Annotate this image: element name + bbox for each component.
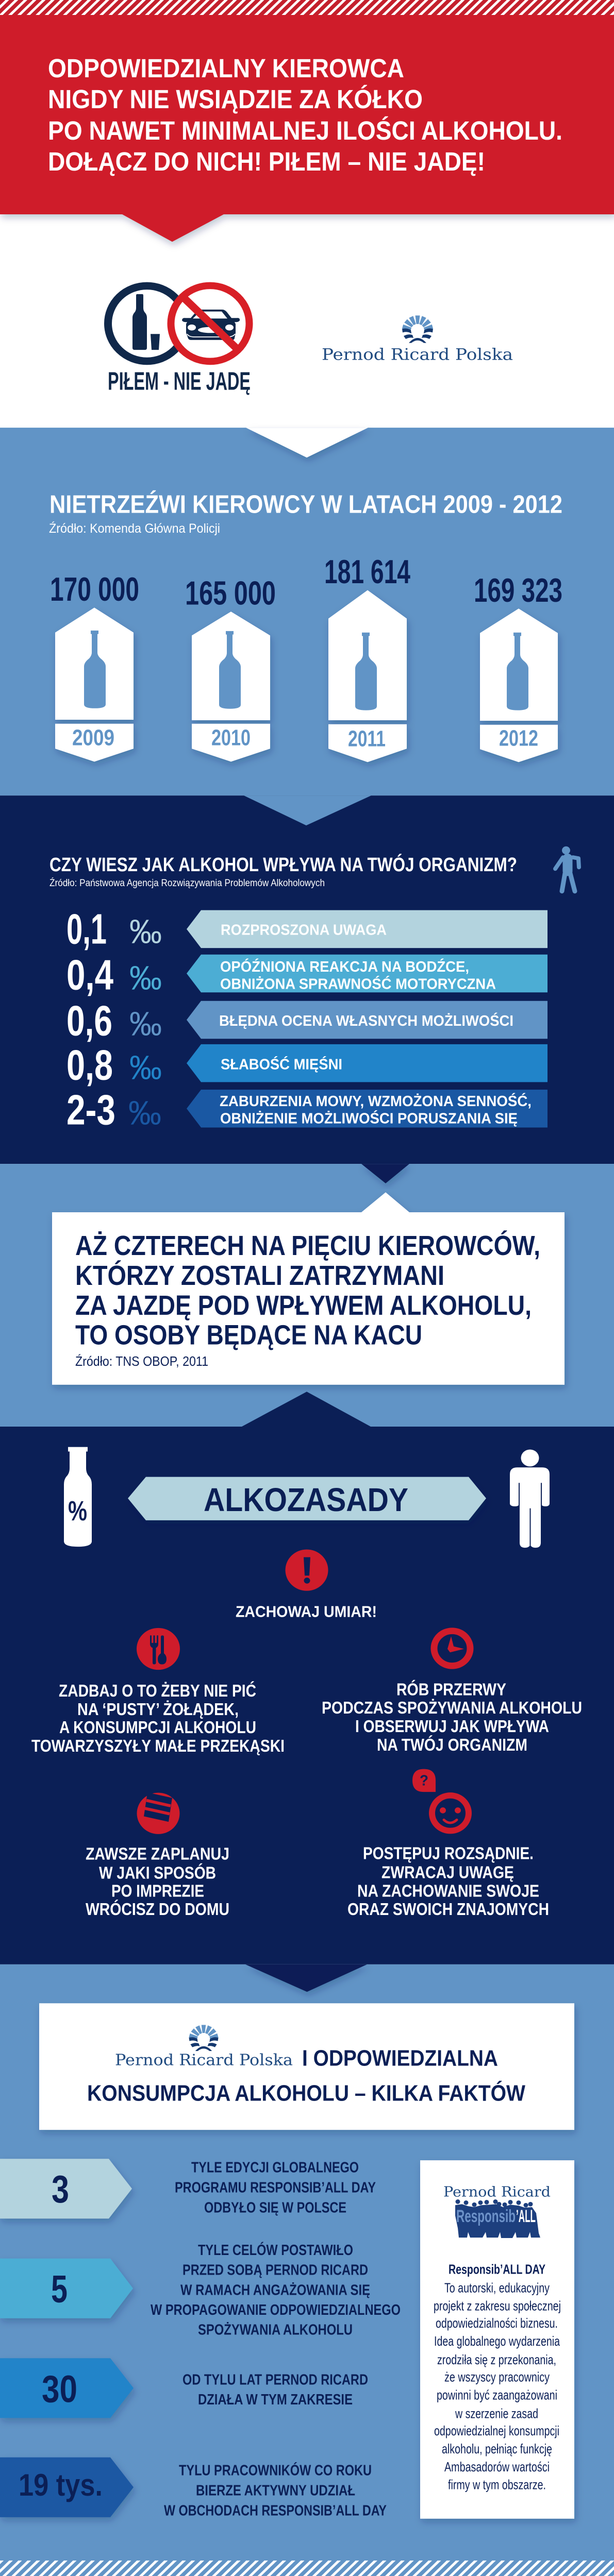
- fact 3: [0, 2159, 376, 2218]
- icon: note: [137, 1792, 179, 1834]
- sidebar text: alkoholu, pełniąc funkcję: [442, 2441, 552, 2456]
- white pointer: [246, 428, 368, 457]
- source: Źródło: TNS OBOP, 2011: [75, 1353, 208, 1369]
- rule text: RÓB PRZERWY: [396, 1680, 506, 1699]
- number: 5: [51, 2268, 68, 2311]
- icon: walking person: [555, 846, 579, 891]
- blue background: [0, 1164, 614, 1427]
- rule text: NA ‘PUSTY’ ŻOŁĄDEK,: [77, 1701, 239, 1719]
- banner: [128, 1477, 486, 1520]
- bottle ring: [108, 286, 186, 361]
- bar: [187, 1090, 547, 1127]
- rule: breaks: [322, 1631, 582, 1755]
- heading line 1: I ODPOWIEDZIALNA: [302, 2046, 498, 2071]
- rule text: ZADBAJ O TO ŻEBY NIE PIĆ: [59, 1681, 256, 1701]
- per mille: ‰: [128, 1094, 161, 1132]
- rule: plan: [86, 1792, 229, 1919]
- rule text: [347, 1844, 549, 1919]
- bar label: OBNIŻONA SPRAWNOŚĆ MOTORYCZNA: [220, 975, 496, 992]
- logo: Pernod Ricard Polska: [322, 315, 513, 364]
- sidebar text: powinni być zaangażowani: [437, 2387, 557, 2402]
- rule text: TOWARZYSZYŁY MAŁE PRZEKĄSKI: [31, 1737, 285, 1756]
- icon: bottle with percent: %: [68, 1495, 87, 1527]
- fact text: PRZED SOBĄ PERNOD RICARD: [182, 2262, 368, 2279]
- bar label: OPÓŹNIONA REAKCJA NA BODŹCE,: [220, 958, 469, 975]
- value 0,1: 0,1: [67, 905, 107, 953]
- bar label: [220, 1092, 532, 1127]
- number: 3: [52, 2168, 69, 2211]
- rule text: ORAZ SWOICH ZNAJOMYCH: [347, 1901, 549, 1919]
- logo: Piłem - nie jadę: [108, 285, 251, 395]
- navy background: [0, 1392, 614, 1964]
- row 0,6: [67, 997, 547, 1044]
- rule text: ZAWSZE ZAPLANUJ: [86, 1845, 229, 1864]
- fact 30: [0, 2358, 368, 2418]
- heading line 2: KONSUMPCJA ALKOHOLU – KILKA FAKTÓW: [87, 2080, 525, 2106]
- white box: [420, 2160, 574, 2519]
- bar: [187, 910, 547, 948]
- logo name: Pernod Ricard: [443, 2184, 551, 2200]
- bar: [187, 1044, 547, 1082]
- sidebar text: odpowiedzialnej konsumpcji: [434, 2424, 559, 2438]
- rule text: I OBSERWUJ JAK WPŁYWA: [355, 1718, 549, 1736]
- sidebar text: odpowiedzialności biznesu.: [436, 2316, 558, 2331]
- bottle 2009: [84, 631, 106, 708]
- year 2012: 2012: [499, 726, 538, 751]
- fact text: [175, 2159, 376, 2216]
- column 2012: [474, 571, 562, 762]
- source: Źródło: Państwowa Agencja Rozwiązywania Problemów Alkoholowych: [49, 877, 325, 889]
- fact 19 tys.: [0, 2458, 387, 2519]
- panel: Pernod Ricard facts: [0, 1964, 614, 2576]
- icon: question bubble: [412, 1769, 436, 1792]
- value 2-3: 2-3: [67, 1086, 115, 1133]
- blue background: [0, 1964, 614, 2576]
- value 0,8: 0,8: [67, 1041, 113, 1089]
- car: [182, 310, 240, 340]
- rule text: POSTĘPUJ ROZSĄDNIE.: [363, 1844, 534, 1863]
- bottle 2011: [355, 633, 377, 710]
- rule: moderation: [236, 1549, 377, 1620]
- header text: [48, 54, 562, 177]
- logo: crowd silhouette: Responsib: [456, 2207, 516, 2226]
- source: Źródło: Komenda Główna Policji: [49, 521, 220, 536]
- column 2010: [185, 574, 276, 761]
- white box: [39, 2003, 574, 2130]
- sidebar text: [434, 2280, 561, 2493]
- sidebar text: To autorski, edukacyjny: [444, 2280, 550, 2295]
- per mille: ‰: [129, 1005, 162, 1043]
- fact text: OD TYLU LAT PERNOD RICARD: [182, 2371, 368, 2388]
- panel: hangover callout: [0, 1164, 614, 1427]
- bar label: BŁĘDNA OCENA WŁASNYCH MOŻLIWOŚCI: [219, 1012, 513, 1029]
- navy pointer: [245, 1964, 367, 1992]
- rule: eat: [31, 1628, 285, 1756]
- rule text: NA TWÓJ ORGANIZM: [377, 1735, 527, 1755]
- heading box: [39, 2003, 574, 2130]
- panel: drunk drivers 2009-2012: [0, 428, 614, 795]
- icon: smiling face: [432, 1795, 469, 1831]
- pentagon 2012: [480, 608, 558, 721]
- rule text: [31, 1681, 285, 1756]
- sidebar text: Ambasadorów wartości: [444, 2459, 550, 2475]
- red slash: [184, 298, 237, 349]
- sun mark: [402, 315, 433, 343]
- fact text: TYLU PRACOWNIKÓW CO ROKU: [179, 2462, 372, 2479]
- sidebar text: projekt z zakresu społecznej: [434, 2298, 561, 2313]
- fact text: [182, 2371, 368, 2408]
- sidebar text: firmy w tym obszarze.: [448, 2477, 546, 2493]
- rule: sensible: [347, 1769, 549, 1919]
- bar label: ROZPROSZONA UWAGA: [221, 922, 387, 938]
- panel: alcohol rules: [0, 1392, 614, 1964]
- year tag 2012: [480, 725, 558, 762]
- arrow: [0, 2259, 133, 2318]
- banner title: ALKOZASADY: [204, 1481, 408, 1518]
- header text: ODPOWIEDZIALNY KIEROWCA: [48, 54, 404, 83]
- no-driving ring: [171, 285, 250, 361]
- fact 5: [0, 2241, 401, 2338]
- row 0,8: [67, 1041, 547, 1089]
- per mille: ‰: [129, 959, 162, 997]
- rule text: W JAKI SPOSÓB: [99, 1863, 216, 1883]
- rule text: ZWRACAJ UWAGĘ: [381, 1863, 514, 1882]
- year 2011: 2011: [348, 726, 386, 751]
- number: 19 tys.: [19, 2468, 103, 2502]
- row 2-3: [67, 1086, 547, 1133]
- fact text: DZIAŁA W TYM ZAKRESIE: [198, 2392, 353, 2408]
- pentagon 2010: [192, 612, 270, 720]
- bottle and glass: [132, 294, 160, 350]
- logo: crowd silhouette: ’ALL: [516, 2207, 536, 2226]
- sidebar heading: Responsib’ALL DAY: [449, 2262, 545, 2277]
- fact text: ODBYŁO SIĘ W POLSCE: [204, 2199, 346, 2216]
- blue pointer: [244, 795, 371, 825]
- fact text: W PROPAGOWANIE ODPOWIEDZIALNEGO: [151, 2301, 401, 2318]
- header text: NIGDY NIE WSIĄDZIE ZA KÓŁKO: [48, 85, 423, 114]
- callout text: KTÓRZY ZOSTALI ZATRZYMANI: [75, 1260, 444, 1291]
- fact text: TYLE EDYCJI GLOBALNEGO: [191, 2159, 359, 2176]
- rule text: NA ZACHOWANIE SWOJE: [357, 1882, 539, 1901]
- year 2010: 2010: [211, 725, 251, 750]
- arrow: [0, 2159, 132, 2218]
- brand name: Pernod Ricard Polska: [115, 2052, 293, 2069]
- sidebar text: zrodziła się z przekonania,: [437, 2352, 556, 2367]
- per mille: ‰: [129, 1049, 162, 1087]
- value 2012: 169 323: [474, 571, 562, 609]
- year tag 2009: [55, 724, 134, 761]
- rule text: PO IMPREZIE: [111, 1882, 204, 1901]
- sun mark: [189, 2025, 219, 2051]
- bottle 2010: [219, 631, 241, 709]
- fact text: BIERZE AKTYWNY UDZIAŁ: [196, 2482, 355, 2499]
- year tag 2011: [328, 724, 407, 762]
- bar label: ZABURZENIA MOWY, WZMOŻONA SENNOŚĆ,: [220, 1092, 532, 1110]
- value 2011: 181 614: [324, 553, 410, 590]
- bottom stripes: [0, 2561, 614, 2576]
- year tag 2010: [192, 724, 270, 761]
- fact text: W RAMACH ANGAŻOWANIA SIĘ: [180, 2282, 370, 2298]
- panel: red header: [0, 0, 614, 242]
- bar label: [220, 958, 496, 992]
- row 0,4: [67, 951, 547, 998]
- callout text: ZA JAZDĘ POD WPŁYWEM ALKOHOLU,: [75, 1290, 532, 1321]
- value 2010: 165 000: [185, 574, 276, 612]
- row 0,1: [67, 905, 547, 953]
- sidebar text: że wszyscy pracownicy: [444, 2369, 550, 2385]
- icon: bottle with percent: [64, 1447, 92, 1547]
- icon: clock: [434, 1631, 470, 1666]
- year 2009: 2009: [72, 725, 114, 750]
- callout text: [75, 1230, 540, 1350]
- navy background: [0, 795, 614, 1164]
- icon: standing man: [510, 1449, 550, 1548]
- banner shape: [128, 1477, 486, 1520]
- sidebar text: Idea globalnego wydarzenia: [434, 2333, 560, 2349]
- pentagon 2011: [328, 590, 407, 720]
- fact text: W OBCHODACH RESPONSIB’ALL DAY: [164, 2502, 387, 2519]
- rule text: A KONSUMPCJI ALKOHOLU: [59, 1718, 256, 1737]
- value 0,4: 0,4: [67, 951, 113, 998]
- panel: alcohol effects: [0, 795, 614, 1164]
- rule text: [86, 1845, 229, 1919]
- icon: question bubble: ?: [420, 1772, 428, 1789]
- number: 30: [42, 2367, 77, 2411]
- red panel shape: [0, 15, 614, 242]
- logo: crowd silhouette: [455, 2199, 540, 2238]
- fact text: PROGRAMU RESPONSIB’ALL DAY: [175, 2179, 376, 2196]
- campaign name: PIŁEM - NIE JADĘ: [108, 367, 251, 395]
- bar: [187, 1001, 547, 1039]
- bar label: SŁABOŚĆ MIĘŚNI: [221, 1056, 342, 1073]
- header text: DOŁĄCZ DO NICH! PIŁEM – NIE JADĘ!: [48, 147, 485, 177]
- bar: [187, 955, 547, 992]
- rule text: ZACHOWAJ UMIAR!: [236, 1603, 377, 1620]
- sidebar text: w szerzenie zasad: [455, 2406, 538, 2421]
- value 0,6: 0,6: [67, 997, 112, 1044]
- column 2009: [50, 570, 139, 761]
- callout text: TO OSOBY BĘDĄCE NA KACU: [75, 1319, 422, 1350]
- fact text: [151, 2241, 401, 2338]
- arrow: [0, 2458, 134, 2517]
- rule text: WRÓCISZ DO DOMU: [86, 1900, 229, 1919]
- column 2011: [324, 553, 410, 762]
- navy pointer: [361, 1164, 409, 1183]
- bottle 2012: [507, 633, 528, 710]
- value 2009: 170 000: [50, 570, 139, 608]
- rule text: [322, 1680, 582, 1755]
- fact text: [164, 2462, 387, 2519]
- icon: fork and spoon: [137, 1628, 180, 1670]
- white callout box: [52, 1192, 565, 1385]
- blue background: [0, 428, 614, 795]
- brand name: Pernod Ricard Polska: [322, 346, 513, 364]
- fact text: TYLE CELÓW POSTAWIŁO: [198, 2241, 353, 2259]
- arrow: [0, 2358, 134, 2418]
- pentagon 2009: [55, 607, 134, 720]
- section title: CZY WIESZ JAK ALKOHOL WPŁYWA NA TWÓJ ORGANIZM?: [49, 854, 517, 876]
- icon: exclamation: [286, 1549, 328, 1591]
- fact text: SPOŻYWANIA ALKOHOLU: [198, 2321, 353, 2338]
- top stripes: [0, 0, 614, 15]
- bar label: OBNIŻENIE MOŻLIWOŚCI PORUSZANIA SIĘ: [220, 1110, 518, 1127]
- per mille: ‰: [129, 912, 162, 951]
- sidebar: Responsib'ALL Day: [420, 2160, 574, 2519]
